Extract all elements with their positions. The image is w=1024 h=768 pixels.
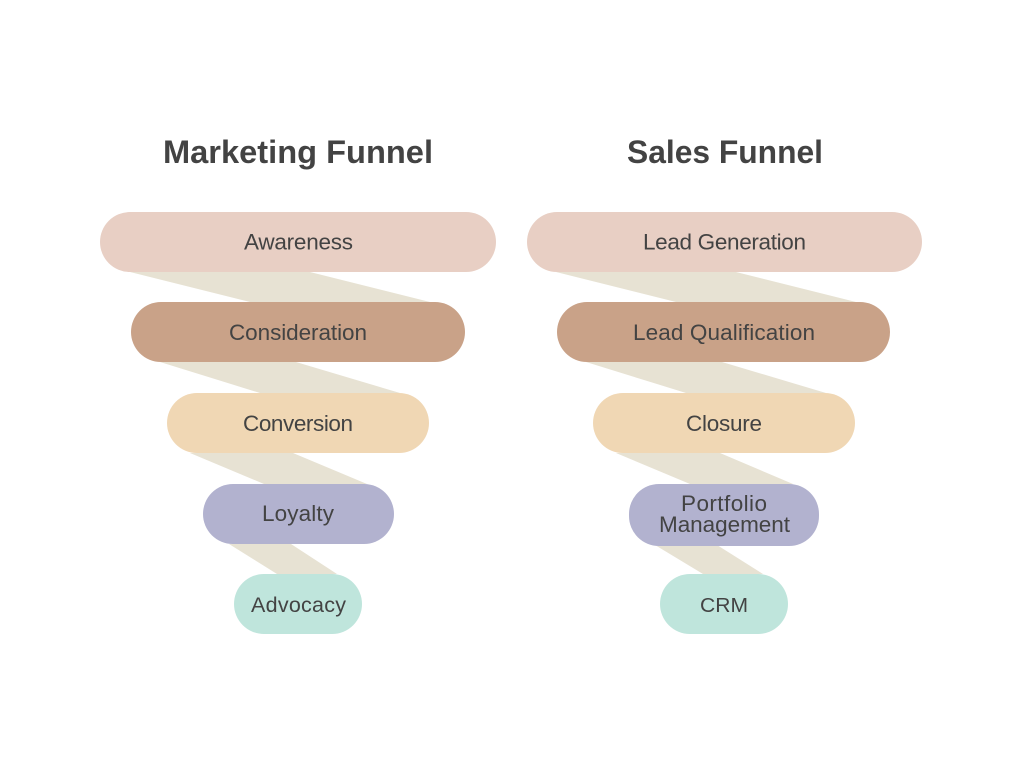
stage: conversion: Conversion: [243, 411, 353, 436]
connector: portfolio management to crm: [655, 545, 763, 574]
stage: portfolio management: Portfolio: [681, 491, 767, 516]
stage: lead qualification: Lead Qualification: [633, 320, 815, 345]
stage: closure: Closure: [686, 411, 762, 436]
connector: consideration to conversion: [160, 362, 400, 393]
stage: advocacy: [234, 574, 362, 634]
stage: closure: [593, 393, 855, 453]
stage: loyalty: Loyalty: [262, 501, 335, 526]
stage: crm: [660, 574, 788, 634]
connector: lead qualification to closure: [586, 362, 826, 393]
stage: conversion: [167, 393, 429, 453]
stage: lead generation: [527, 212, 922, 272]
stage: lead generation: Lead Generation: [643, 230, 806, 254]
stage: awareness: [100, 212, 496, 272]
stage: loyalty: [203, 484, 394, 544]
connector: conversion to loyalty: [190, 453, 367, 484]
stage: crm: CRM: [700, 595, 748, 617]
connector: closure to portfolio management: [616, 453, 793, 484]
connector: loyalty to advocacy: [229, 544, 337, 574]
stage: lead qualification: [557, 302, 890, 362]
connector: awareness to consideration: [130, 272, 430, 302]
stage: portfolio management: Management: [659, 512, 791, 537]
stage: portfolio management: [629, 484, 819, 546]
panel: sales funnel: [527, 134, 922, 634]
panel: marketing funnel: [100, 134, 496, 634]
stage: consideration: [131, 302, 465, 362]
stage: advocacy: Advocacy: [251, 593, 346, 617]
heading: marketing funnel: Marketing Funnel: [163, 134, 433, 170]
stage: consideration: Consideration: [229, 320, 367, 345]
heading: sales funnel: Sales Funnel: [627, 134, 823, 170]
connector: lead generation to lead qualification: [556, 272, 856, 302]
stage: awareness: Awareness: [244, 230, 353, 254]
